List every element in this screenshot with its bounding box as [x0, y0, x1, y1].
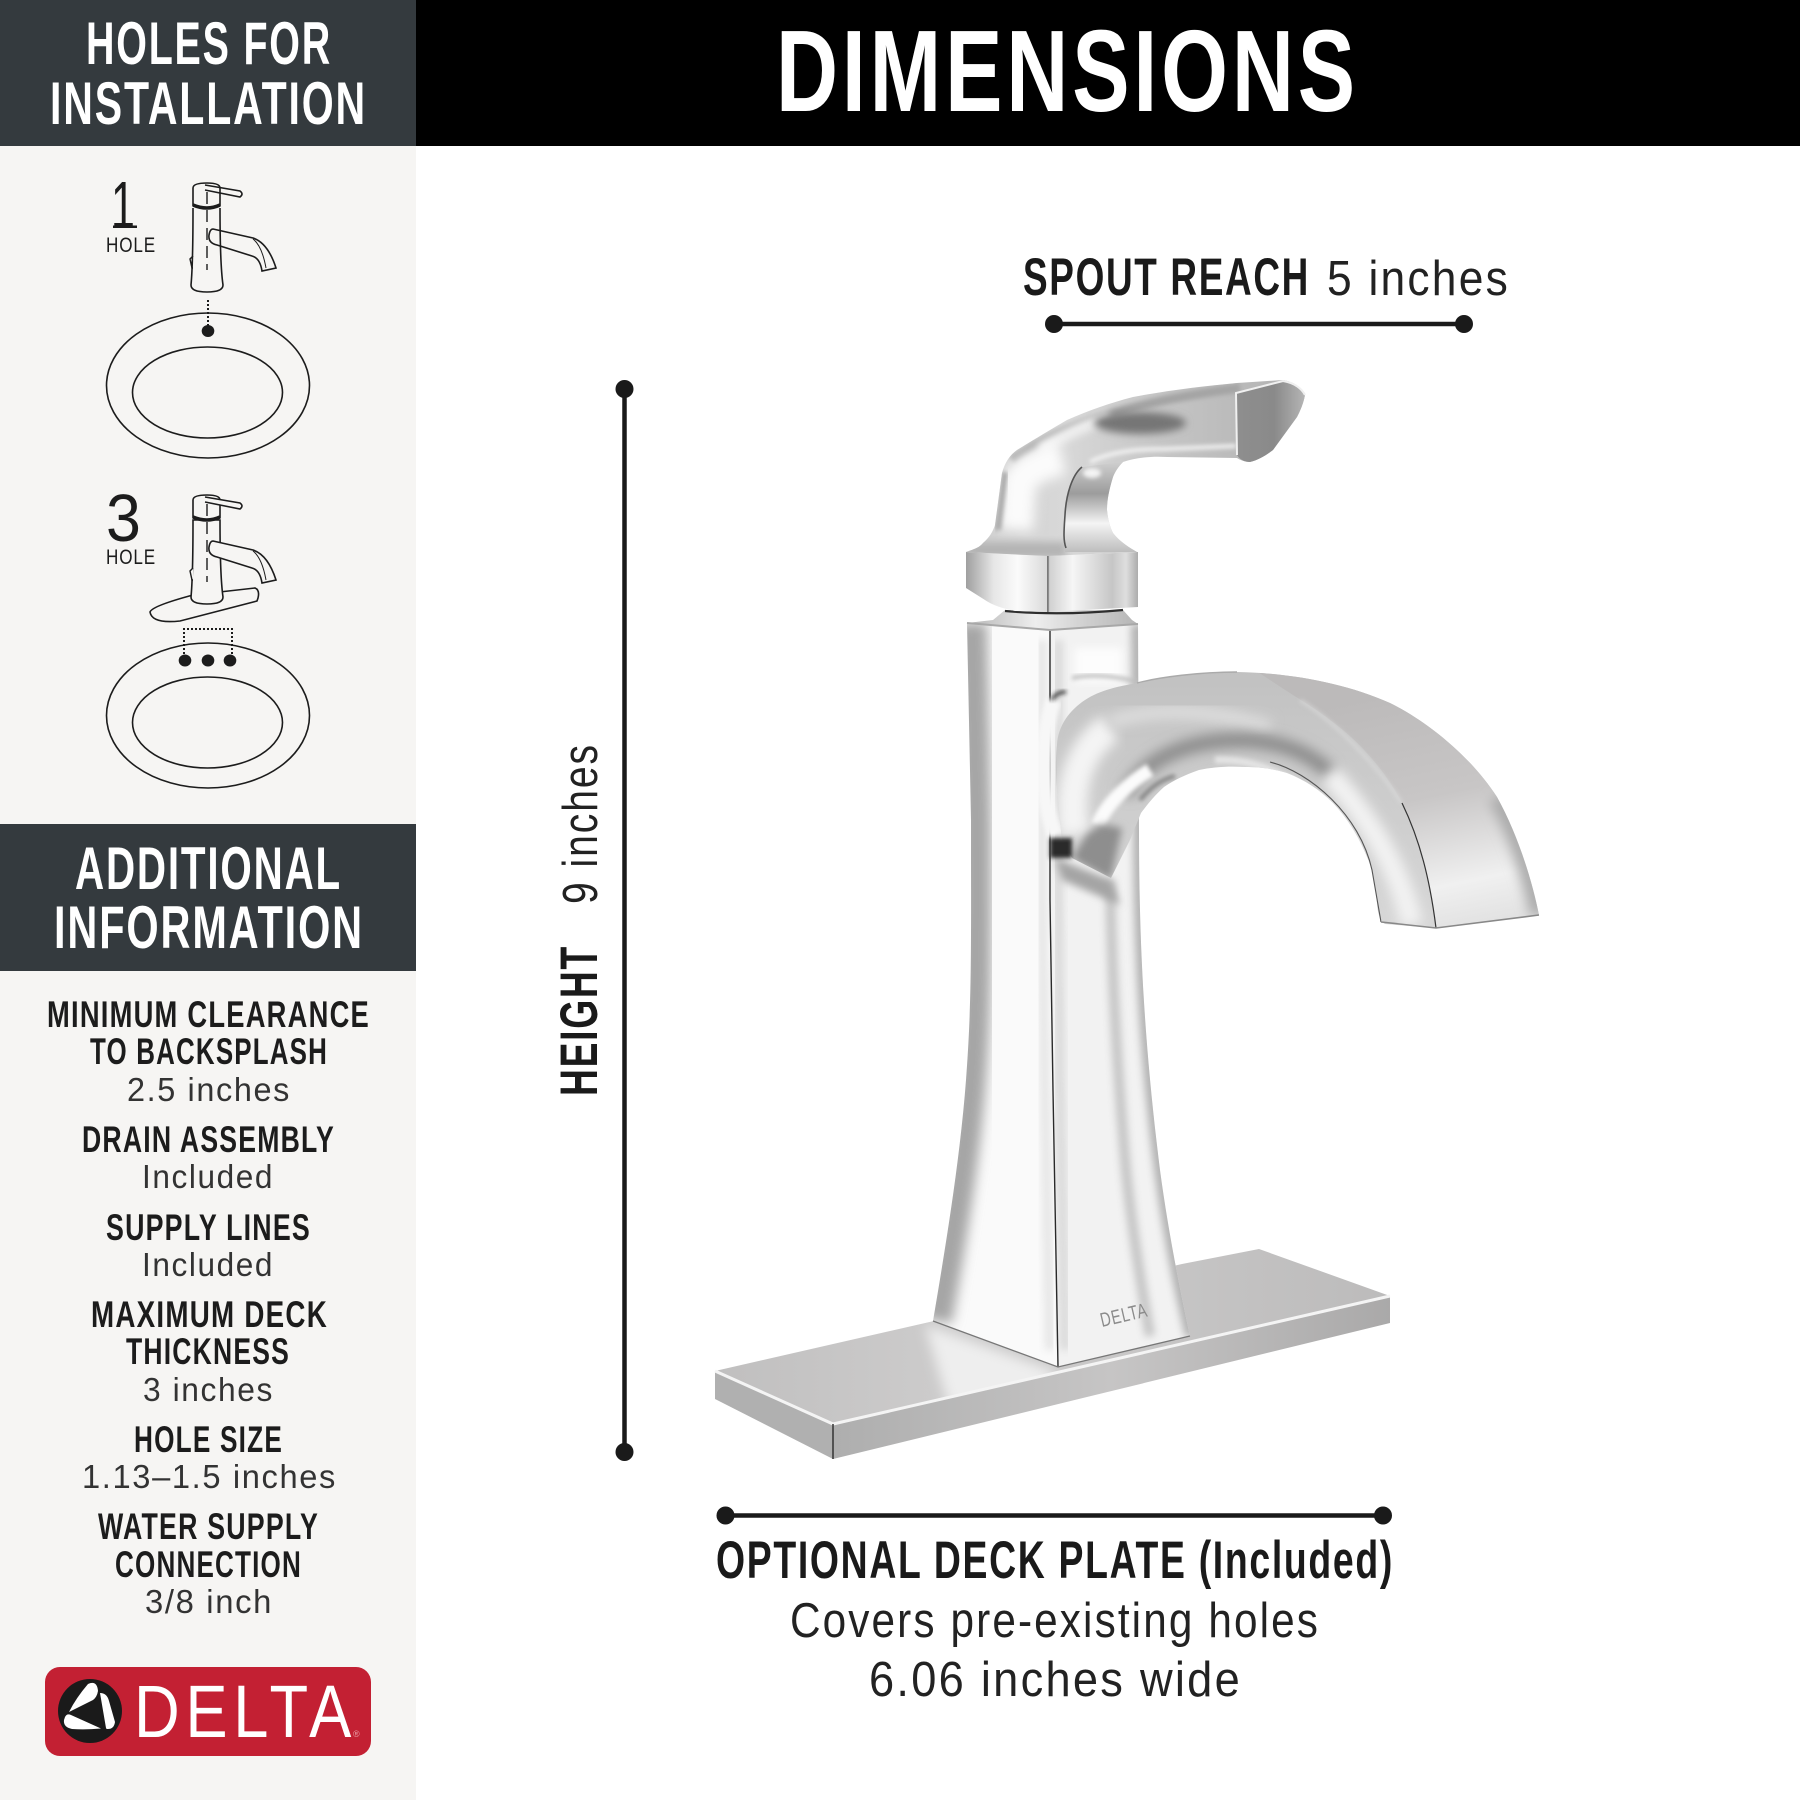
text block: optional deck plate: OPTIONAL DECK PLATE (Included)	[716, 1531, 1394, 1590]
panel: left sidebar	[0, 0, 416, 1800]
arrow: spout reach dimension line	[1045, 315, 1473, 333]
text block: minimum clearance: 2.5 inches	[127, 1071, 291, 1108]
label: height	[550, 743, 609, 1096]
body right face	[1050, 624, 1190, 1367]
text block: water supply connection	[98, 1506, 319, 1620]
title: dimensions	[416, 0, 1800, 146]
body	[933, 623, 1192, 1367]
heading: holes for installation	[0, 0, 416, 146]
spout right facet	[1260, 673, 1530, 927]
title: dimensions: DIMENSIONS	[776, 6, 1359, 136]
deck plate	[715, 1249, 1390, 1459]
text block: drain assembly	[82, 1119, 335, 1195]
text block: minimum clearance	[47, 994, 370, 1108]
text block: water supply connection: CONNECTION	[115, 1544, 302, 1585]
heading: additional information: ADDITIONAL	[75, 835, 342, 902]
illustration: chrome faucet	[715, 375, 1600, 1459]
text block: hole size: HOLE SIZE	[134, 1419, 283, 1460]
handle	[960, 375, 1310, 560]
brand mark on faucet: DELTA	[1098, 1300, 1150, 1332]
handle tip	[1237, 382, 1305, 462]
text block: optional deck plate: Covers pre-existing holes	[790, 1594, 1320, 1648]
text block: supply lines	[106, 1207, 311, 1283]
spout	[1038, 671, 1540, 929]
text block: maximum deck thickness: MAXIMUM DECK	[91, 1294, 328, 1335]
label: spout reach: SPOUT REACH	[1023, 248, 1310, 307]
label: height: 9 inches	[554, 743, 608, 904]
text block: minimum clearance: MINIMUM CLEARANCE	[47, 994, 370, 1035]
heading: holes for installation: HOLES FOR	[86, 10, 332, 77]
text block: supply lines: SUPPLY LINES	[106, 1207, 311, 1248]
arrow: deck plate dimension line	[716, 1506, 1392, 1524]
neck ring	[967, 610, 1138, 630]
body left face	[933, 623, 1058, 1367]
text block: maximum deck thickness: THICKNESS	[126, 1331, 290, 1372]
text block: supply lines: Included	[142, 1246, 274, 1283]
heading: additional information	[0, 824, 416, 971]
spout joint shadow	[1050, 838, 1072, 858]
heading: additional information: INFORMATION	[54, 894, 364, 961]
icon: 1 hole installation: HOLE	[106, 234, 156, 257]
icon: 3 hole installation: HOLE	[106, 546, 156, 569]
text block: optional deck plate: 6.06 inches wide	[869, 1653, 1242, 1707]
arrow: height dimension line	[616, 380, 634, 1461]
label: height: HEIGHT	[550, 945, 609, 1096]
icon: 1 hole installation: 1	[111, 168, 137, 243]
logo: Delta: DELTA	[134, 1670, 357, 1753]
logo: Delta: ®	[353, 1729, 360, 1739]
label: spout reach: 5 inches	[1327, 252, 1510, 306]
text block: optional deck plate	[716, 1531, 1394, 1707]
logo: Delta	[45, 1667, 371, 1756]
text block: hole size	[82, 1419, 337, 1495]
icon: 3 hole installation	[106, 481, 310, 788]
text block: drain assembly: DRAIN ASSEMBLY	[82, 1119, 335, 1160]
text block: maximum deck thickness	[91, 1294, 328, 1408]
text block: water supply connection: 3/8 inch	[145, 1583, 273, 1620]
handle inner curve	[1065, 462, 1137, 552]
icon: 1 hole installation	[106, 168, 310, 458]
body seam	[1050, 628, 1058, 1367]
collar	[966, 552, 1138, 612]
spout base halo	[1044, 700, 1056, 835]
heading: holes for installation: INSTALLATION	[50, 70, 367, 137]
text block: maximum deck thickness: 3 inches	[143, 1371, 274, 1408]
text block: drain assembly: Included	[142, 1158, 274, 1195]
text block: minimum clearance: TO BACKSPLASH	[90, 1031, 328, 1072]
icon: 3 hole installation: 3	[106, 481, 144, 556]
text block: hole size: 1.13–1.5 inches	[82, 1458, 337, 1495]
text block: water supply connection: WATER SUPPLY	[98, 1506, 319, 1547]
